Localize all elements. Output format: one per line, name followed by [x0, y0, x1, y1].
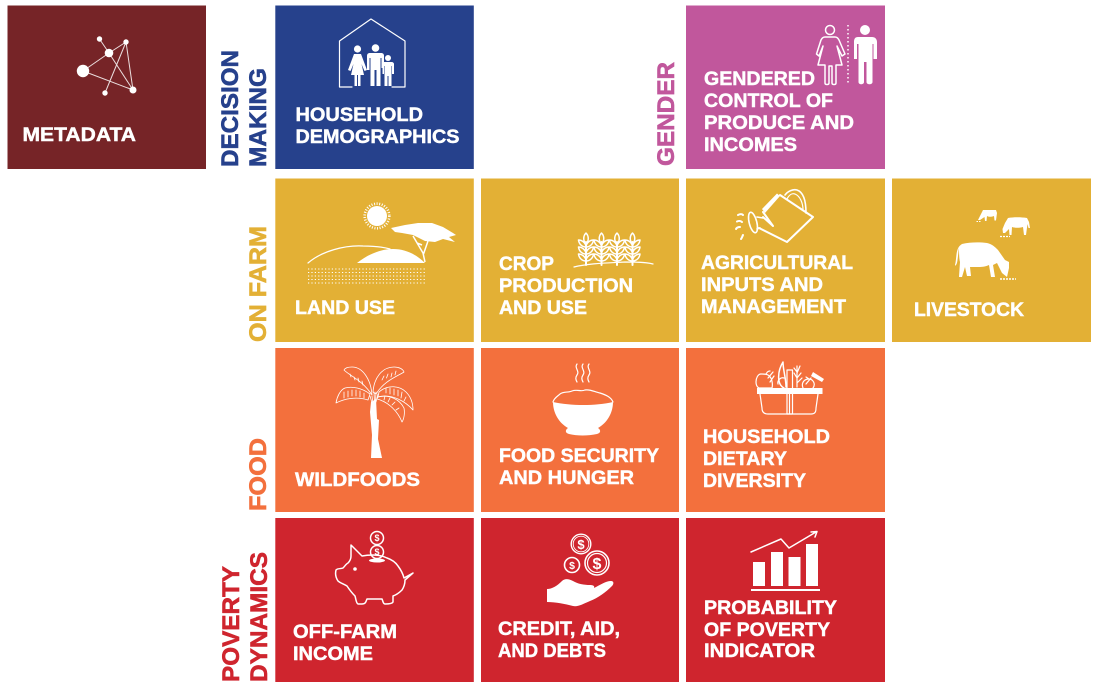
section label: on farm: ON FARM — [245, 226, 272, 342]
section label: food: FOOD — [245, 438, 272, 511]
icon: rising bar chart — [751, 532, 820, 591]
icon: grazing cattle — [955, 210, 1030, 279]
label: food security — [499, 445, 659, 489]
label: gendered control — [704, 68, 854, 156]
label: dietary diversity — [703, 426, 830, 492]
icon: hand with coins: $ — [569, 560, 575, 572]
label: off-farm income: OFF-FARM — [293, 621, 397, 643]
panel: food security — [481, 348, 679, 512]
panel: agricultural inputs — [686, 178, 885, 342]
icon: piggy bank: $ — [374, 533, 380, 543]
label: wildfoods: WILDFOODS — [295, 469, 420, 491]
icon: woman and man — [816, 25, 877, 85]
panel: dietary diversity — [686, 348, 885, 512]
label: crop production: AND USE — [499, 297, 587, 319]
section label: decision making — [217, 50, 272, 167]
label: probability of poverty — [704, 597, 837, 662]
icon: steaming bowl — [553, 364, 613, 436]
icon: hand with coins: $ — [577, 537, 585, 552]
panel: credit, aid and debts — [481, 518, 679, 682]
panel: gendered control — [686, 6, 885, 169]
label: gendered control: CONTROL OF — [704, 90, 833, 112]
label: household demographics — [296, 104, 460, 148]
label: dietary diversity: HOUSEHOLD — [703, 426, 830, 448]
icon: wheat field — [574, 233, 653, 267]
panel: crop production — [481, 178, 679, 342]
label: dietary diversity: DIETARY — [703, 448, 787, 470]
label: land use: LAND USE — [295, 297, 395, 319]
label: probability of poverty: OF POVERTY — [704, 619, 830, 641]
label: household demographics: DEMOGRAPHICS — [296, 126, 460, 148]
label: food security: FOOD SECURITY — [499, 445, 659, 467]
section label: poverty dynamics: DYNAMICS — [246, 552, 273, 682]
panel: metadata — [8, 6, 206, 169]
icon: hand with coins: $ — [593, 556, 602, 573]
section label: decision making: DECISION — [217, 50, 244, 167]
section label: poverty dynamics — [218, 552, 273, 682]
icon: piggy bank — [336, 532, 413, 604]
label: gendered control: INCOMES — [704, 134, 797, 156]
label: agricultural inputs: AGRICULTURAL — [701, 252, 853, 274]
icon: family in house — [340, 19, 405, 87]
label: credit, aid and debts — [498, 618, 620, 662]
panel: land use — [275, 178, 474, 342]
label: metadata: METADATA — [22, 124, 136, 146]
label: credit, aid and debts: CREDIT, AID, — [498, 618, 620, 640]
label: credit, aid and debts: AND DEBTS — [498, 640, 606, 662]
label: gendered control: GENDERED — [704, 68, 815, 90]
panel: wildfoods — [275, 348, 474, 512]
panel: off-farm income — [275, 518, 474, 682]
icon: sun, tree and hills — [308, 204, 456, 283]
panel: household demographics — [275, 6, 474, 169]
label: agricultural inputs — [701, 252, 853, 318]
label: livestock: LIVESTOCK — [914, 299, 1024, 321]
icon: basket of produce — [756, 362, 824, 414]
panel: probability of poverty — [686, 518, 885, 682]
icon: piggy bank: $ — [374, 547, 380, 557]
section label: decision making: MAKING — [245, 68, 272, 167]
label: agricultural inputs: INPUTS AND — [701, 274, 823, 296]
icon: network — [77, 36, 136, 96]
label: dietary diversity: DIVERSITY — [703, 470, 806, 492]
label: agricultural inputs: MANAGEMENT — [701, 296, 846, 318]
label: household demographics: HOUSEHOLD — [296, 104, 423, 126]
icon: palm tree — [336, 367, 413, 458]
section label: poverty dynamics: POVERTY — [218, 566, 245, 682]
icon: hand with coins — [547, 534, 613, 606]
label: probability of poverty: INDICATOR — [704, 640, 815, 662]
section label: gender: GENDER — [653, 62, 680, 166]
label: off-farm income: INCOME — [293, 643, 373, 665]
label: crop production: PRODUCTION — [499, 275, 633, 297]
label: crop production: CROP — [499, 253, 554, 275]
panel: livestock — [892, 178, 1091, 342]
label: crop production — [499, 253, 633, 319]
label: off-farm income — [293, 621, 397, 665]
icon: watering can — [736, 190, 813, 242]
label: food security: AND HUNGER — [499, 467, 634, 489]
label: gendered control: PRODUCE AND — [704, 112, 854, 134]
label: probability of poverty: PROBABILITY — [704, 597, 837, 619]
